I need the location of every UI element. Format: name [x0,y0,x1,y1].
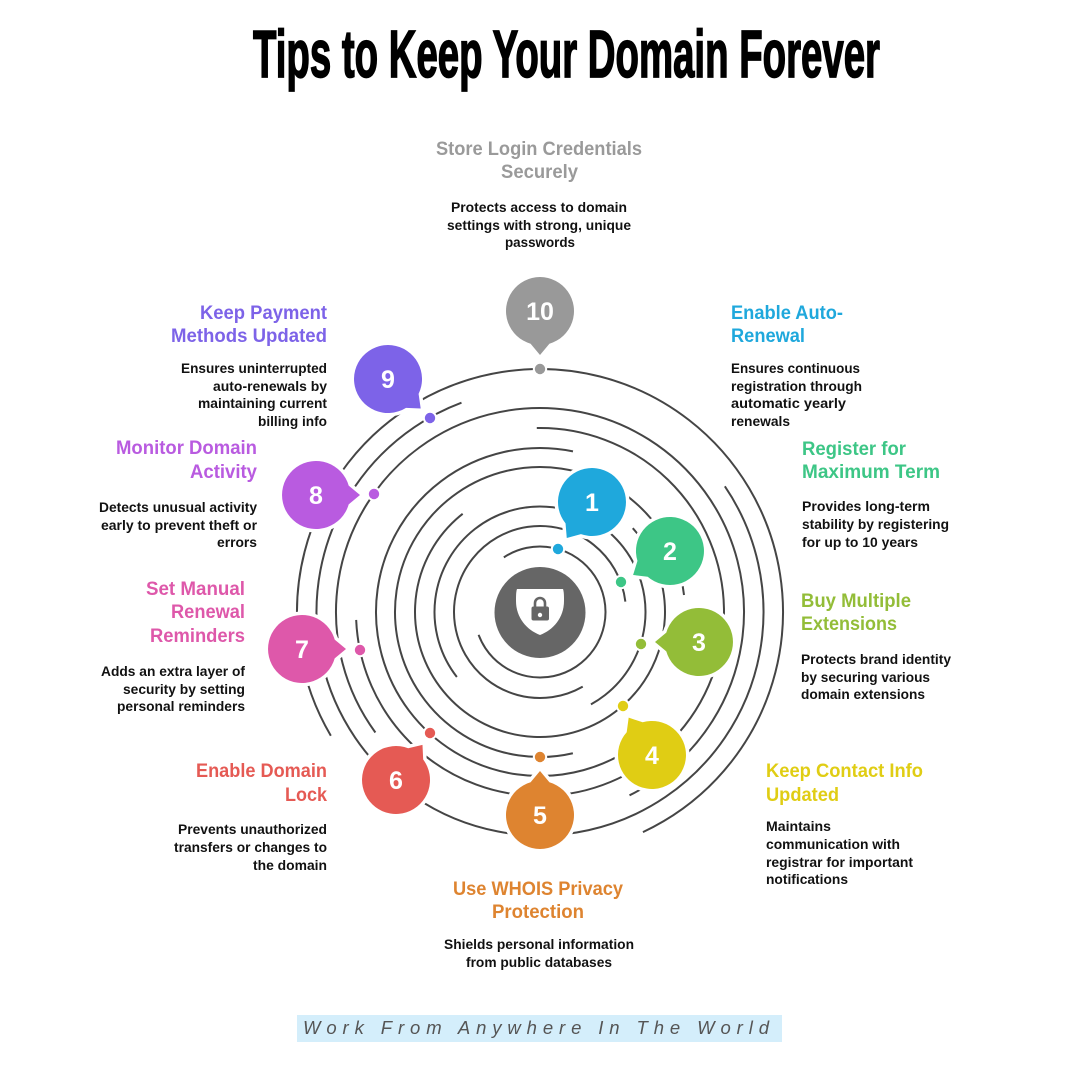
bubble 5 [506,771,574,849]
text block: tip 7: security by setting [123,682,245,697]
bubble 6: 6 [389,767,403,795]
text block: tip 6: Prevents unauthorized [178,822,327,837]
text block: tip 7: Renewal [171,602,245,623]
bubble 1: 1 [585,489,599,517]
dots on rings [355,364,646,762]
bubble 2 [615,504,717,603]
text block: tip 4: communication with [766,837,900,852]
text block: tip 9 [171,303,328,429]
bubble 5: 5 [533,802,547,830]
text block: tip 10 [436,139,642,250]
text block: tip 9: auto-renewals by [213,379,328,394]
text block: tip 9: billing info [258,414,327,429]
text block: tip 10: settings with strong, unique [447,218,631,233]
bubble 3 [655,608,733,676]
text block: tip 4: notifications [766,872,848,887]
bubble 8: 8 [309,482,323,510]
bubble 7 [268,615,346,683]
text block: tip 5: from public databases [466,955,612,970]
text block: tip 7: Set Manual [146,579,245,600]
text block: tip 3: Extensions [801,614,897,635]
text block: tip 8: Activity [190,462,257,483]
bubble 9: 9 [381,366,395,394]
text block: tip 2: Provides long-term [802,499,930,514]
text block: tip 1 [731,303,862,429]
icon: central shield with padlock [494,567,586,658]
text block: tip 6: Lock [285,785,327,806]
text block: tip 3: Buy Multiple [801,591,911,612]
text block: tip 2 [802,439,949,550]
text block: tip 9: Methods Updated [171,326,327,347]
concentric ring arcs [207,279,873,945]
text block: tip 7 [101,579,246,714]
text block: tip 1: renewals [731,414,790,429]
text block: tip 5: Use WHOIS Privacy [453,879,623,900]
text block: tip 4: registrar for important [766,855,914,870]
text block: tip 6: Enable Domain [196,761,327,782]
bubble 2: 2 [663,538,677,566]
text block: tip 3: domain extensions [801,687,925,702]
bubble 8 [282,461,360,529]
text block: tip 9: Ensures uninterrupted [181,361,327,376]
text block: tip 5: Protection [492,902,584,923]
text block: tip 5 [444,879,634,970]
text block: tip 10: Store Login Credentials [436,139,642,160]
text block: tip 10: passwords [505,235,575,250]
text block: tip 2: for up to 10 years [802,535,918,550]
bubble 6 [348,724,450,828]
text block: tip 2: Register for [802,439,907,460]
text block: tip 3 [801,591,951,702]
text block: tip 8 [99,438,258,550]
text block: tip 6: the domain [253,858,327,873]
text block: tip 7: personal reminders [117,699,245,714]
text block: tip 8: Monitor Domain [116,438,257,459]
text block: tip 3: Protects brand identity [801,652,951,667]
text block: tip 2: stability by registering [802,517,949,532]
bubble 1 [539,455,639,558]
bubble 10 [506,277,574,355]
text block: tip 8: errors [217,535,257,550]
text block: tip 4: Maintains [766,819,831,834]
text block: tip 7: Reminders [150,626,245,647]
text block: tip 10: Securely [501,162,578,183]
bubble 4 [600,700,699,802]
text block: tip 3: by securing various [801,670,930,685]
text block: tip 4: Keep Contact Info [766,761,923,782]
text block: tip 1: registration through [731,379,862,394]
text block: tip 9: maintaining current [198,396,328,411]
footer band: Work From Anywhere In The World [303,1017,770,1038]
text block: tip 8: early to prevent theft or [101,518,258,533]
text block: tip 7: Adds an extra layer of [101,664,246,679]
text block: tip 6 [174,761,327,873]
text block: tip 2: Maximum Term [802,462,940,483]
text block: tip 1: Renewal [731,326,805,347]
text block: tip 6: transfers or changes to [174,840,327,855]
text block: tip 4 [766,761,923,887]
bubble 9 [340,331,443,434]
text block: tip 1: Ensures continuous [731,361,860,376]
bubble 4: 4 [645,742,659,770]
bubble 10: 10 [526,298,554,326]
text block: tip 4: Updated [766,785,839,806]
text block: tip 5: Shields personal information [444,937,634,952]
text block: tip 1: Enable Auto- [731,303,843,324]
bubble 3: 3 [692,629,706,657]
text block: tip 1: automatic yearly [731,396,847,411]
text block: tip 9: Keep Payment [200,303,328,324]
text block: tip 8: Detects unusual activity [99,500,257,515]
text block: tip 10: Protects access to domain [451,200,627,215]
bubble 7: 7 [295,636,309,664]
